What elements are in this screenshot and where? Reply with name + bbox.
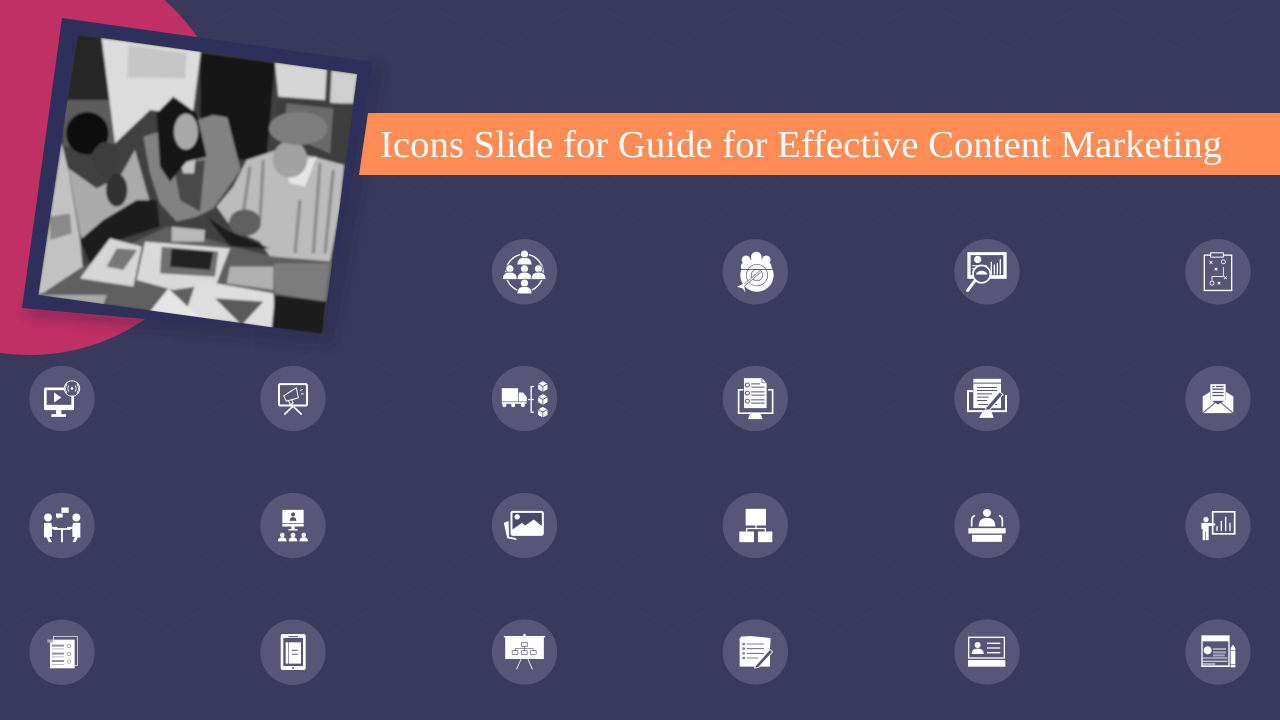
icon: two people meeting — [29, 493, 95, 558]
icon: web page with pencil — [1185, 619, 1251, 685]
icon: video monitor — [29, 366, 95, 431]
icon: strategy clipboard — [1185, 239, 1251, 304]
title: Icons Slide for Guide for Effective Content Marketing — [380, 124, 1222, 166]
icon: web content editing — [954, 366, 1020, 431]
pink circle — [0, 0, 233, 355]
icon: image gallery — [492, 493, 557, 558]
icon: data analysis — [954, 239, 1020, 304]
icon: profile on laptop — [954, 619, 1020, 685]
title banner — [359, 113, 1280, 175]
icon: organisation hierarchy — [723, 493, 788, 558]
icon: presenter with chart — [1185, 493, 1251, 558]
icon: flowchart on easel — [492, 619, 557, 685]
icon: delivery truck and packages — [492, 366, 557, 431]
icon: target audience — [723, 239, 788, 304]
icon: email newsletter — [1185, 366, 1251, 431]
icon: speaker at podium — [954, 493, 1020, 558]
icon: notes and pen — [723, 619, 788, 685]
icon: tablet document — [260, 620, 326, 685]
icon: checklist documents — [29, 620, 95, 685]
icon: webinar audience — [260, 493, 326, 558]
icon: megaphone presentation — [260, 366, 326, 431]
icon: checklist on monitor — [723, 366, 788, 431]
photo: team meeting — [33, 30, 367, 340]
photo frame — [22, 18, 381, 343]
icon: team network — [492, 239, 557, 304]
